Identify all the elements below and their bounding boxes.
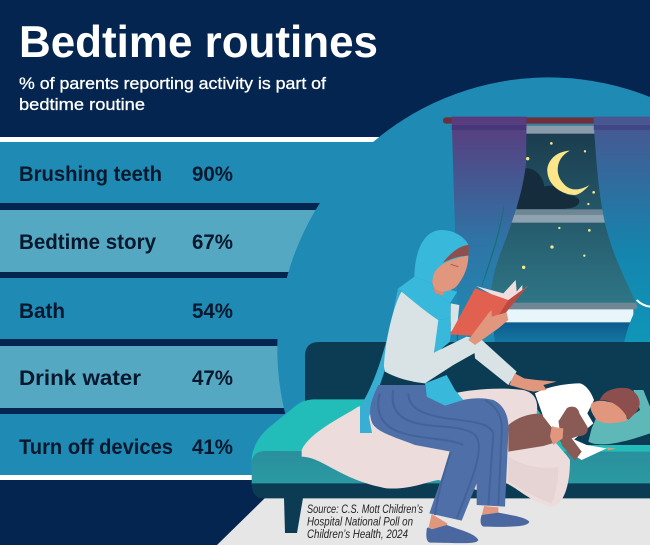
subtitle [19,74,326,114]
stars [522,142,595,269]
book spine edge [473,286,528,337]
scarf band [398,277,451,320]
child lower sleeve [572,438,607,460]
cloud [517,168,579,209]
row: bedtime story: Bedtime story [19,230,156,254]
panel: activity rows [0,142,400,475]
child with teddy bear [508,383,650,461]
blanket folds [508,457,558,503]
child arm sleeve [535,390,567,427]
child hand below [606,447,616,450]
curtain tie [637,300,650,307]
trouser silhouette [370,385,509,521]
lower scarf [425,375,463,406]
row: turn off devices: Turn off devices [19,435,173,459]
headboard [305,342,650,498]
curtain rod [443,117,603,124]
row: bath: 54% [192,299,233,323]
row: turn off devices: 41% [192,435,233,459]
bed leg [284,498,303,533]
blouse behind book [451,303,459,332]
blanket [302,389,570,507]
crescent moon [547,151,589,195]
right curtain [593,117,650,343]
teddy bear head and limbs [558,407,588,461]
book pages [476,280,528,305]
source note: Hospital National Poll on [307,514,413,528]
woman reading [360,230,530,543]
near shoe [426,525,478,543]
left curtain [452,117,527,343]
row: bedtime story [19,230,233,254]
scarf hanging strip [434,318,451,355]
pillow [588,390,650,444]
floor [217,498,650,545]
subtitle: % of parents reporting activity is part of [19,74,326,93]
row: bedtime story: 67% [192,230,233,254]
mattress and blanket [252,389,650,507]
white rule above rows [0,137,400,142]
face [433,255,468,292]
child hair [600,388,640,420]
left curtain fold [482,206,504,287]
mattress top [252,399,650,470]
near foot [428,514,447,534]
hijab back [360,288,405,433]
left curtain band [452,125,526,130]
source note: Source: C.S. Mott Children’s [307,502,423,516]
area below window sill [457,322,633,345]
right curtain band [594,125,650,130]
night sky [490,125,640,310]
teddy bear body [508,414,563,452]
row: brushing teeth: 90% [192,162,233,186]
mattress side [252,451,650,485]
hair [443,245,469,263]
trouser stripes [378,390,502,518]
blouse and near arm [384,292,480,383]
row: drink water: Drink water [19,366,142,390]
blue circle backdrop [277,77,650,545]
row: brushing teeth: Brushing teeth [19,162,162,186]
far arm [473,338,517,385]
child hand on teddy [550,427,563,445]
bed base [252,483,650,498]
window scene [443,117,650,345]
book cover [450,288,508,337]
trousers [370,385,529,543]
row: drink water [19,366,233,390]
row: bath: Bath [19,299,65,323]
subtitle: bedtime routine [19,95,145,114]
child shirt [535,383,594,442]
neck [432,280,445,296]
eye [451,264,458,267]
source note [307,502,423,541]
row: bath [19,299,233,323]
source note: Children’s Health, 2024 [307,527,408,541]
far foot [482,506,498,517]
hijab head [414,230,469,303]
far shoe [481,513,529,527]
window frame [457,125,640,322]
woman's hand on child [510,377,557,392]
far hand [509,373,530,391]
white rule below rows [0,475,300,480]
child face [591,401,627,423]
title: Bedtime routines [19,18,378,67]
hand on book [468,310,508,345]
row: drink water: 47% [192,366,233,390]
